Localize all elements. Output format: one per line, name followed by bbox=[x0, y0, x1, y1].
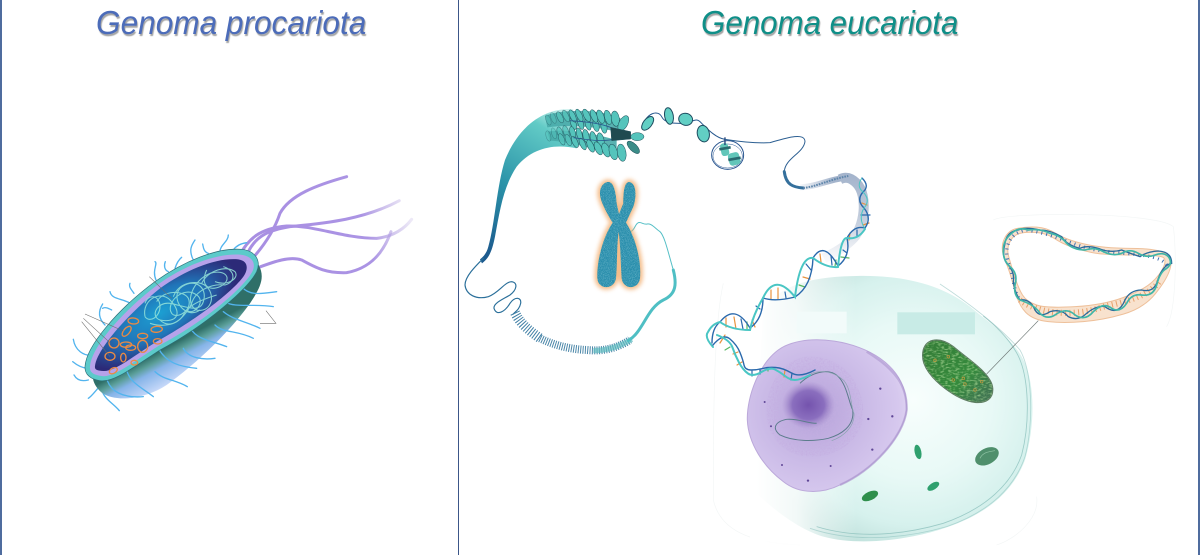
magnified nucleosome circle bbox=[712, 137, 744, 169]
extended fiber to chromosome bbox=[628, 270, 675, 341]
cell wall layers bbox=[85, 249, 258, 381]
faint outer halo bbox=[713, 214, 1175, 545]
pili bbox=[73, 235, 247, 411]
nucleosome beads bbox=[639, 107, 725, 143]
DNA double helix bbox=[707, 178, 870, 380]
pili over shadow bbox=[107, 287, 277, 397]
cytoplasm bbox=[95, 259, 247, 371]
nucleoid DNA bbox=[145, 267, 236, 325]
blue strand bbox=[1004, 228, 1172, 319]
condensed nucleosomes bbox=[544, 108, 644, 162]
chromosome bbox=[597, 182, 640, 287]
solenoid coil bbox=[515, 313, 632, 351]
peach halo bbox=[1002, 227, 1171, 322]
nucleolus bbox=[782, 381, 835, 429]
linker DNA ribbon bbox=[725, 136, 805, 172]
helix strand, blue, lower bbox=[713, 337, 815, 375]
connector line bbox=[987, 321, 1038, 374]
plasmids bbox=[105, 318, 163, 375]
flagella bbox=[238, 177, 412, 273]
leader lines bbox=[82, 277, 276, 357]
base pairs bbox=[1020, 280, 1160, 313]
label mask, white bbox=[797, 312, 847, 333]
chromatin fiber band bbox=[480, 109, 577, 263]
grey helix halo bbox=[784, 172, 864, 258]
cell membrane bbox=[810, 284, 1031, 538]
cell left fade bbox=[750, 273, 857, 550]
fine chromatin bbox=[465, 258, 521, 314]
mitochondrial DNA loop bbox=[1002, 227, 1172, 322]
helix strand, teal, upper bbox=[707, 229, 865, 347]
helix strand, blue, upper bbox=[712, 178, 868, 343]
cell body bbox=[753, 276, 1032, 541]
mitochondrion bbox=[923, 340, 993, 402]
small mitochondria bbox=[860, 443, 1002, 503]
base pair rungs bbox=[720, 203, 870, 380]
intranuclear DNA bbox=[775, 372, 853, 440]
illustration: bacterium bbox=[72, 175, 413, 412]
illustration: eukaryotic genome bbox=[464, 107, 1176, 545]
cell body shadow bbox=[93, 265, 262, 398]
panel: genoma eucariota bbox=[460, 0, 1200, 555]
panel: genoma procariota bbox=[0, 0, 459, 555]
nucleus bbox=[747, 340, 907, 491]
title: genoma eucariota: Genoma eucariota bbox=[701, 4, 958, 41]
title: genoma procariota: Genoma procariota bbox=[96, 4, 366, 41]
teal strand bbox=[1003, 229, 1170, 318]
nuclear pores bbox=[764, 387, 893, 482]
helix strand, teal, lower bbox=[717, 335, 810, 380]
label mask, teal bbox=[897, 312, 975, 334]
